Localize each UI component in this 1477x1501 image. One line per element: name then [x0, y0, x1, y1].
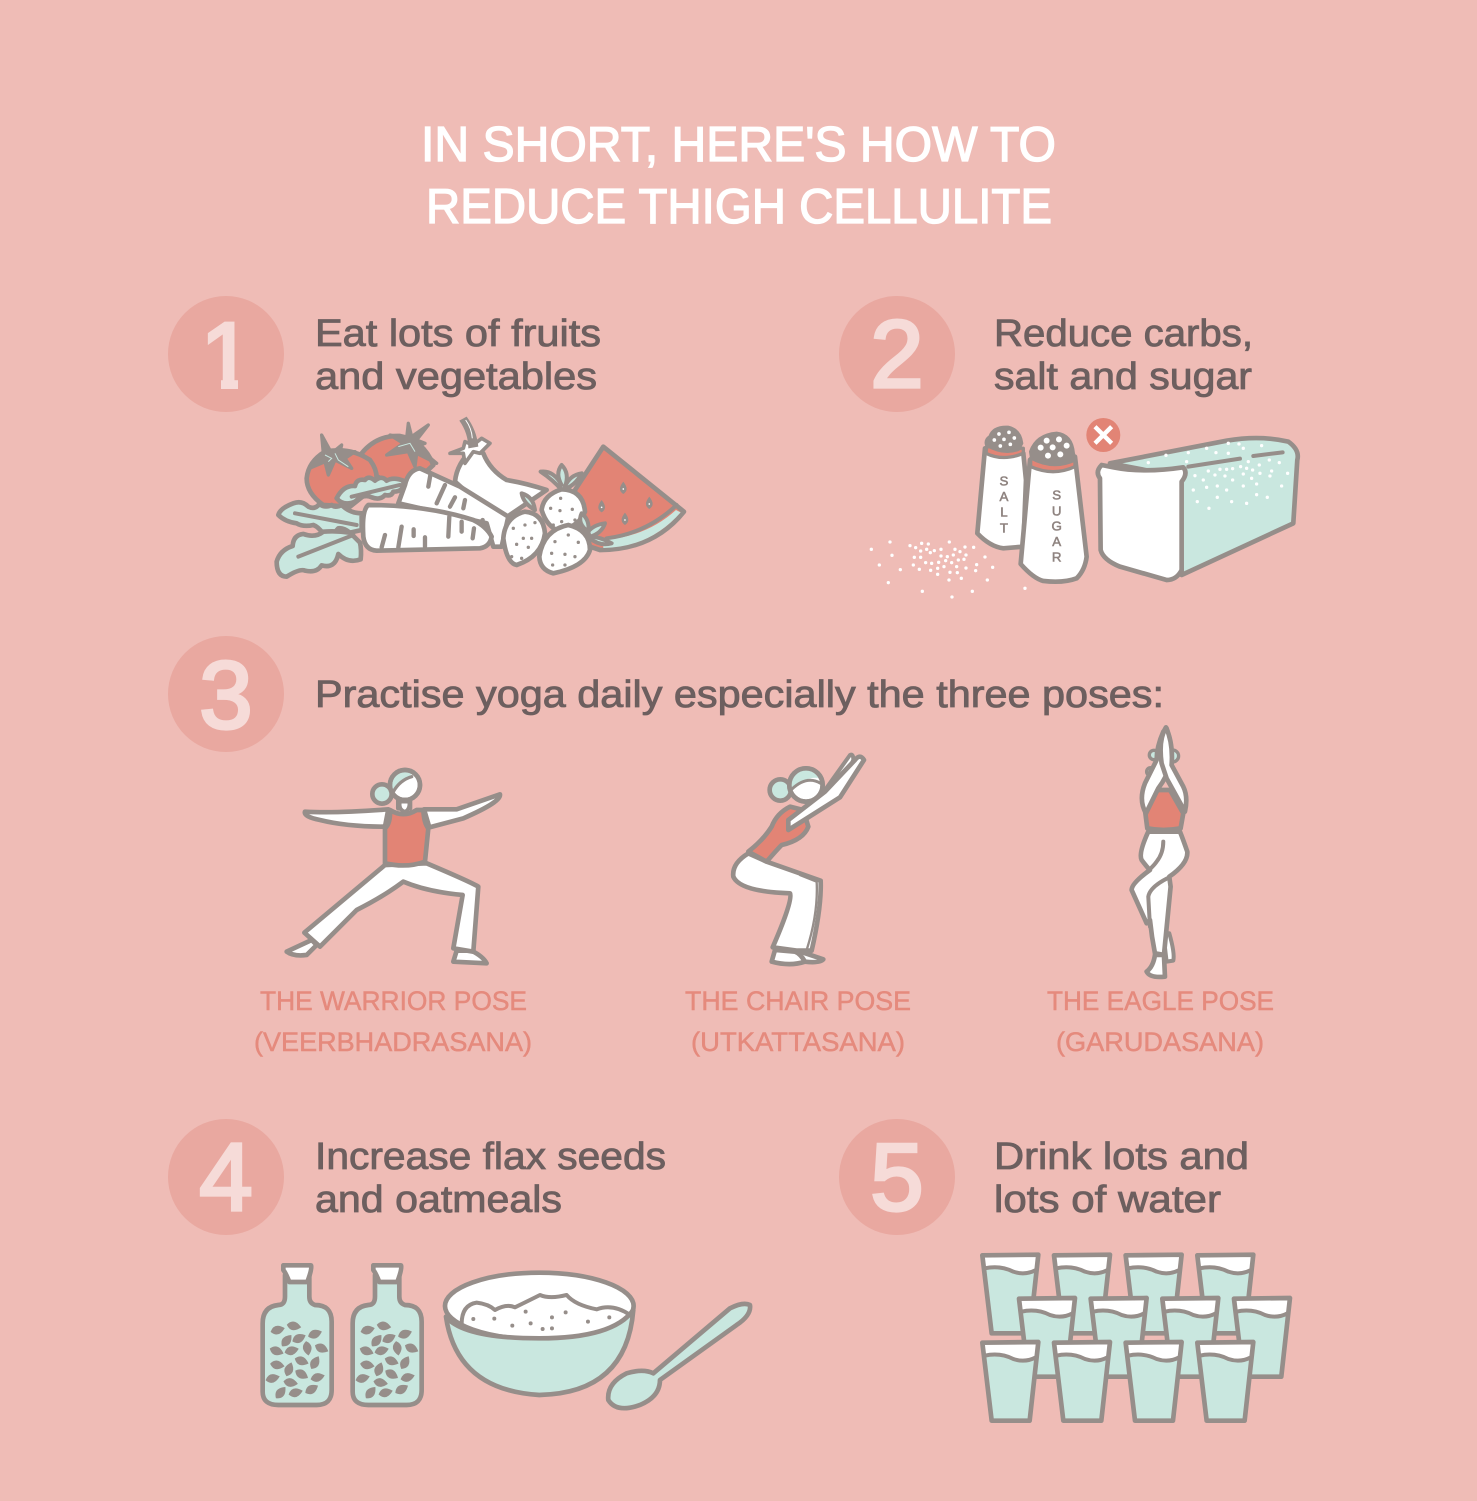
number badge 5 [839, 1119, 955, 1235]
step 1 heading: Eat lots of fruits [315, 313, 601, 355]
step 2 heading: Reduce carbs, [994, 313, 1253, 355]
step 5 heading: Drink lots and [994, 1136, 1249, 1178]
icon: flax seed bottles, oatmeal bowl and spoon [263, 1265, 750, 1408]
title [421, 118, 1056, 234]
loaf of bread [1098, 438, 1298, 580]
step 4 heading: and oatmeals [315, 1179, 562, 1221]
icon: salt, sugar and bread [871, 418, 1298, 597]
icon: fruits and vegetables [277, 417, 684, 577]
step 4 heading: Increase flax seeds [315, 1136, 666, 1178]
number badge 4: 4 [199, 1124, 253, 1231]
step 4 heading [315, 1136, 666, 1221]
number badge 4 [168, 1119, 284, 1235]
pose label: eagle: (GARUDASANA) [1056, 1027, 1264, 1057]
number badge 5: 5 [870, 1124, 924, 1231]
eagle pose figure [1132, 727, 1187, 977]
panel: step 3 yoga poses [168, 636, 1274, 1057]
pose label: warrior [254, 986, 532, 1057]
step 5 heading [994, 1136, 1249, 1221]
number badge 2: 2 [870, 301, 924, 408]
number badge 3 [168, 636, 284, 752]
sugar shaker: A [1052, 534, 1061, 549]
pose label: eagle: THE EAGLE POSE [1047, 986, 1274, 1016]
number badge 1 [168, 296, 284, 412]
spilled salt [871, 542, 1025, 597]
step 1 heading [315, 313, 601, 398]
salt shaker: T [1000, 520, 1008, 535]
pose label: chair: (UTKATTASANA) [691, 1027, 905, 1057]
panel: step 2 carbs, salt and sugar [839, 296, 1298, 597]
step 2 heading: salt and sugar [994, 356, 1252, 398]
warrior pose figure [287, 770, 500, 963]
number badge 2 [839, 296, 955, 412]
pose label: warrior: (VEERBHADRASANA) [254, 1027, 532, 1057]
panel: step 1 fruits and vegetables [168, 296, 684, 577]
flax seed bottle 1 [263, 1265, 332, 1405]
panel: step 5 drink water [839, 1119, 1290, 1421]
step 3 heading: Practise yoga daily especially the three poses: [315, 674, 1164, 716]
oatmeal bowl [445, 1273, 634, 1395]
step 1 heading: and vegetables [315, 356, 597, 398]
sugar shaker [1021, 433, 1087, 582]
number badge 3: 3 [199, 642, 253, 749]
sugar shaker: R [1052, 549, 1061, 564]
title: IN SHORT, HERE'S HOW TO [421, 118, 1056, 172]
step 5 heading: lots of water [994, 1179, 1221, 1221]
chair pose figure [733, 755, 864, 964]
icon: glasses of water [982, 1255, 1290, 1421]
number badge 1: 1 [200, 303, 254, 410]
flax seed bottle 2 [353, 1265, 422, 1405]
salt shaker: L [1000, 505, 1008, 520]
sugar shaker: S [1052, 487, 1061, 502]
panel: step 4 flax seeds and oatmeal [168, 1119, 750, 1408]
sugar shaker: U [1052, 503, 1061, 518]
salt shaker: A [1000, 489, 1009, 504]
sugar shaker: G [1051, 519, 1062, 534]
pose label: chair: THE CHAIR POSE [685, 986, 911, 1016]
spoon [608, 1304, 750, 1408]
pose label: warrior: THE WARRIOR POSE [260, 986, 527, 1016]
salt shaker [977, 427, 1026, 548]
pose label: eagle [1047, 986, 1274, 1057]
icon: red cross [1086, 418, 1120, 452]
step 2 heading [994, 313, 1253, 398]
title: REDUCE THIGH CELLULITE [426, 180, 1052, 234]
pose label: chair [685, 986, 911, 1057]
salt shaker: S [1000, 473, 1009, 488]
